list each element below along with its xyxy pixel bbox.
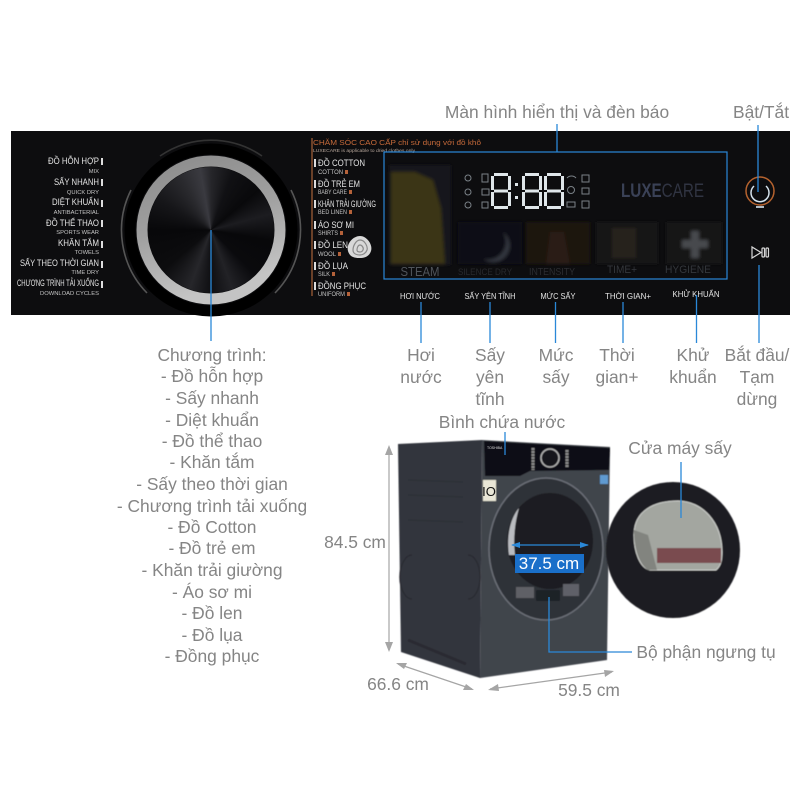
programs list: Chương trình: [157,345,267,365]
display faded labels: STEAM [400,264,440,279]
programs list: - Khăn tắm [169,452,255,472]
button callout labels: dừng [737,389,777,409]
display status icons [465,174,589,208]
right program header [312,137,481,296]
right program labels: UNIFORM [318,292,345,298]
display faded labels [400,264,711,279]
display faded labels: SILENCE DRY [458,267,512,277]
dimension arrows [385,445,614,691]
panel button labels [400,288,720,301]
heading: display label: Màn hình hiển thị và đèn báo [445,102,669,122]
button callout labels: Khử [677,345,710,365]
button callout labels [400,345,790,409]
dial rings [122,140,300,311]
right program labels: SHIRTS [318,231,338,237]
programs list: - Đồ Cotton [168,517,256,537]
label: energy badge: IO [482,484,496,499]
left program labels: ĐỒ HỖN HỢP [48,155,99,166]
display outline [384,152,727,279]
button callout labels: tĩnh [475,389,505,409]
panel button labels: MỨC SẤY [540,291,576,301]
left program labels: DOWNLOAD CYCLES [40,291,99,297]
button callout labels: Thời [599,345,635,365]
programs list: - Khăn trải giường [142,560,282,580]
width dimension: 59.5 cm [558,680,620,700]
height dimension: 84.5 cm [324,532,386,552]
left program labels: MIX [89,169,99,175]
programs list: - Đồ hỗn hợp [161,366,263,386]
left program labels: SẤY NHANH [54,177,99,187]
panel button labels: SẤY YÊN TĨNH [464,291,516,301]
programs list: - Sấy theo thời gian [136,474,288,494]
button callout labels: Sấy [475,345,505,365]
panel button labels: HƠI NƯỚC [400,291,440,301]
panel button labels: KHỬ KHUẨN [672,288,720,299]
right program labels: ÁO SƠ MI [318,220,354,231]
display faded labels: INTENSITY [529,267,575,278]
right program labels: BABY CARE [318,190,347,196]
right program header: CHĂM SÓC CAO CẤP chỉ sử dụng với đồ khô [313,137,481,147]
right program header: LUXECARE is applicable to dried clothes only [313,148,416,153]
LUXECARE logo: LUXECARE [621,181,704,202]
dial knob face [148,167,274,293]
door inner diameter arrow: 37.5 cm [519,554,579,573]
programs list: - Đồ trẻ em [169,538,255,558]
left program labels: ĐỒ THỂ THAO [46,217,99,228]
right program labels: ĐỒ COTTON [318,157,365,169]
callout: water tank: Bình chứa nước [439,412,566,432]
right program labels: WOOL [318,252,337,258]
heading: power label: Bật/Tắt [733,102,789,122]
icon: wool mark [348,236,371,258]
door inner diameter arrow [511,542,589,573]
left program labels: TIME DRY [71,270,99,276]
button callout labels: sấy [542,367,570,387]
programs list: - Chương trình tải xuống [117,496,307,516]
button callout labels: khuẩn [669,367,717,387]
programs list [117,345,307,666]
button callout labels: gian+ [595,367,639,387]
right program labels: ĐỒ LỤA [318,260,349,272]
display images [389,165,722,265]
right program labels: ĐỒ TRẺ EM [318,178,360,190]
left program labels: SẤY THEO THỜI GIAN [20,258,99,268]
programs list: - Sấy nhanh [165,388,259,408]
left program labels: SPORTS WEAR [56,230,99,236]
callout: condenser: Bộ phận ngưng tụ [636,642,776,662]
button callout labels: Hơi [407,345,435,365]
panel button labels: THỜI GIAN+ [605,291,651,301]
left program labels: CHƯƠNG TRÌNH TẢI XUỐNG [17,277,99,288]
programs list: - Đồ lụa [182,625,243,645]
door callout lines [505,432,681,652]
display faded labels: HYGIENE [665,264,711,276]
right program labels [314,157,376,298]
button callout labels: yên [476,367,504,387]
button callout labels: Tạm [740,367,774,387]
programs list: - Áo sơ mi [172,582,252,602]
left program labels: QUICK DRY [67,190,99,196]
callout lines [211,124,759,343]
display faded labels: TIME+ [607,264,637,276]
display digits 8:88 [491,173,564,209]
label: brand: TOSHIBA [487,446,503,450]
open door [606,482,740,618]
left program labels: TOWELS [75,250,99,256]
right program labels: ĐỒ LEN [318,239,348,251]
depth dimension: 66.6 cm [367,674,429,694]
button callout labels: nước [400,367,442,387]
left program labels: ANTIBACTERIAL [54,210,100,216]
programs list: - Đồng phục [165,646,260,666]
right program labels: COTTON [318,170,343,176]
right program labels: BED LINEN [318,210,347,216]
right program labels: ĐỒNG PHỤC [318,280,366,292]
left program labels [17,155,103,297]
icon: start pause [752,247,768,258]
right program labels: SILK [318,272,330,278]
control panel background [11,131,790,315]
dryer body [398,440,610,678]
icon: power button [746,177,774,208]
callout: door: Cửa máy sấy [628,438,732,458]
left program labels: KHĂN TẮM [58,238,99,248]
left program labels: DIỆT KHUẨN [52,196,99,207]
programs list: - Đồ thể thao [162,431,262,451]
right program labels: KHĂN TRẢI GIƯỜNG [318,198,376,210]
button callout labels: Bắt đầu/ [725,345,790,365]
programs list: - Diệt khuẩn [165,410,259,430]
programs list: - Đồ len [182,603,242,623]
button callout labels: Mức [539,345,574,365]
